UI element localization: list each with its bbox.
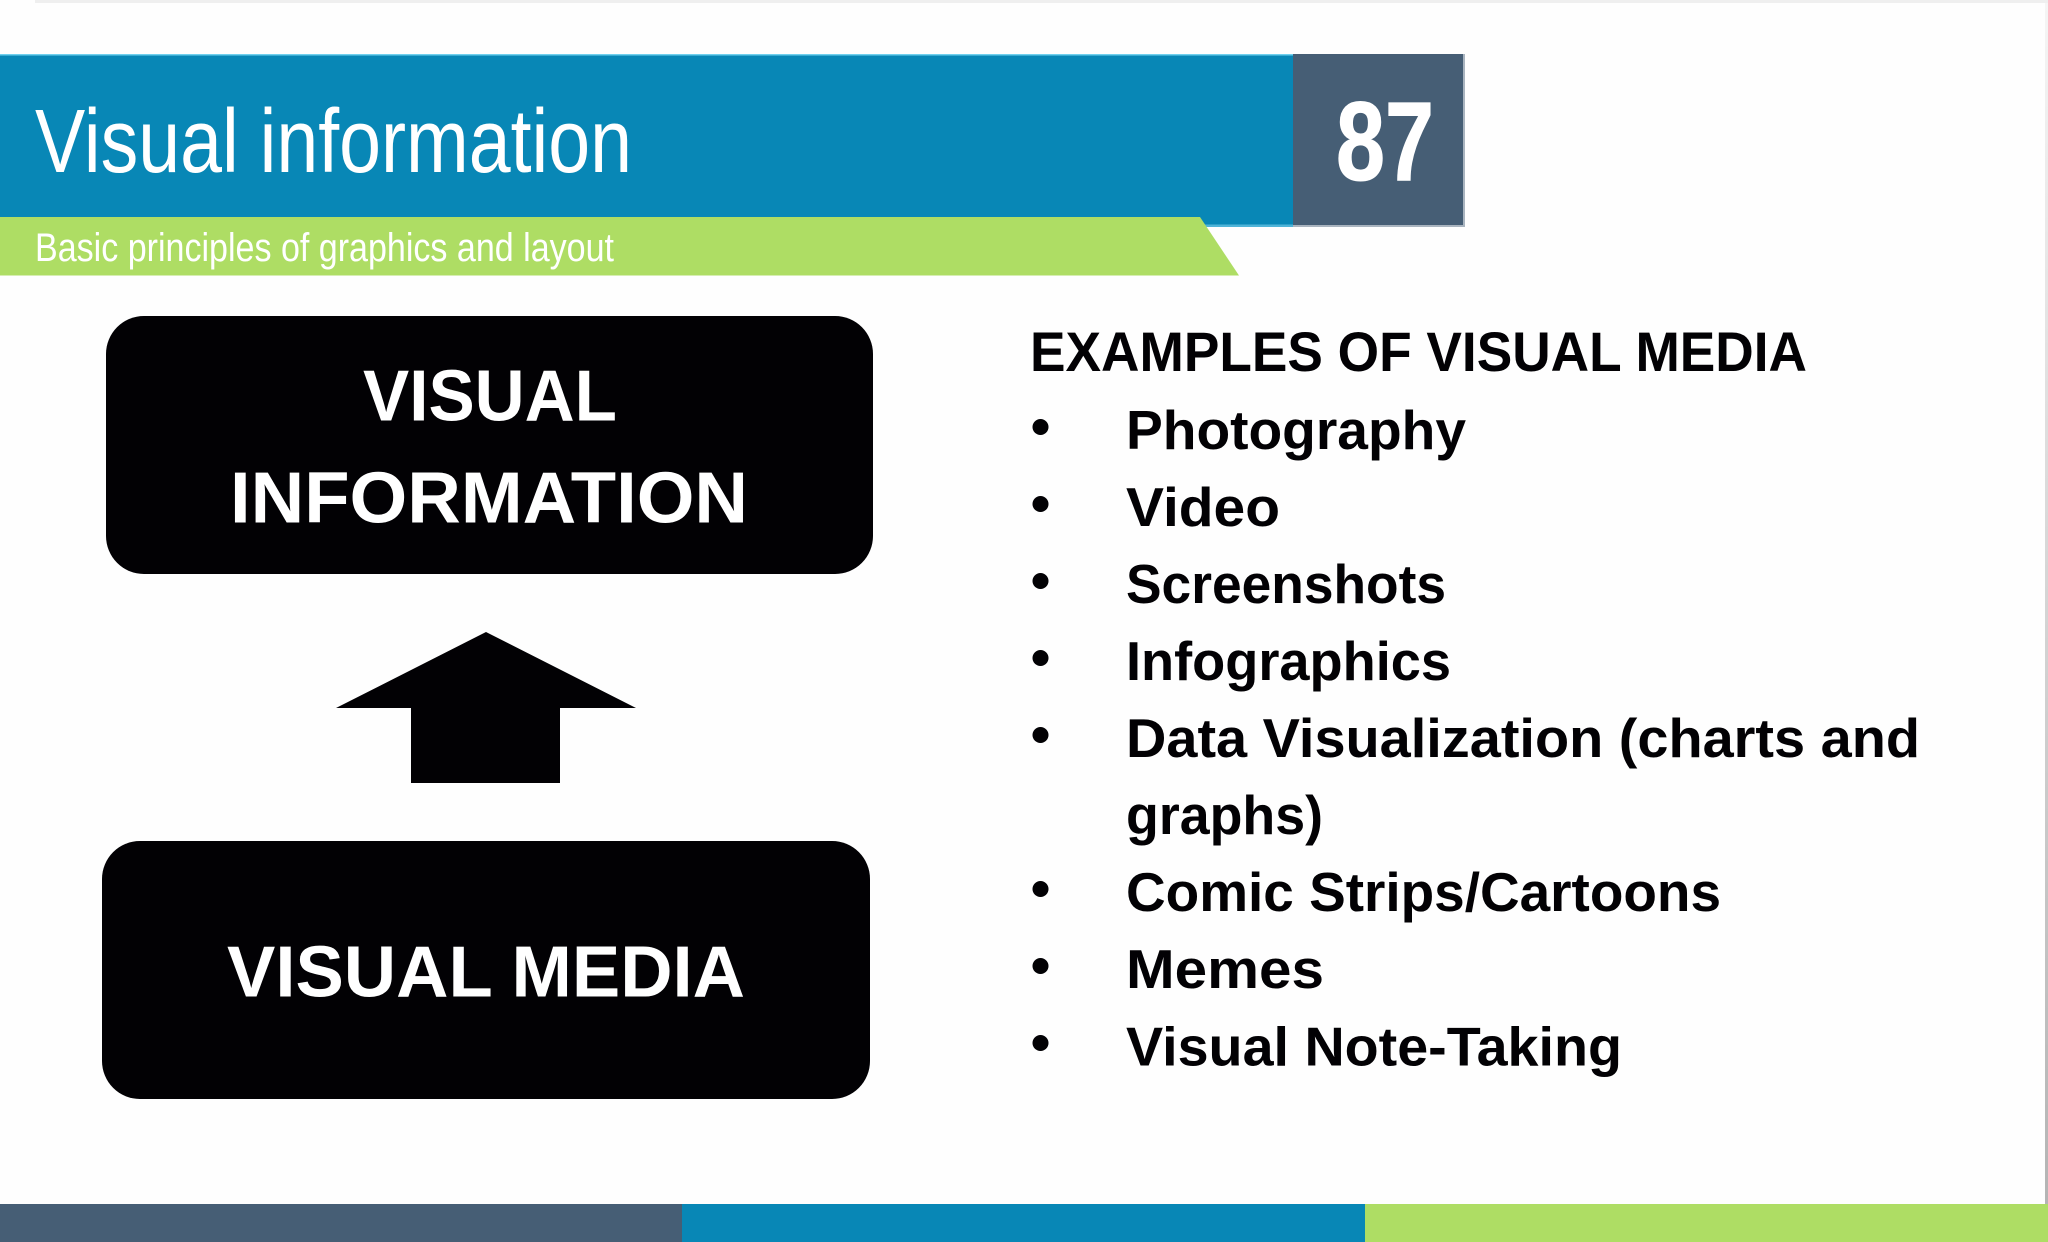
item: data visualization: graphs) xyxy=(1126,784,1323,846)
box: visual information: INFORMATION xyxy=(230,458,748,538)
footer colour band xyxy=(0,1204,2048,1242)
item: comic strips: Comic Strips/Cartoons xyxy=(1126,861,1721,923)
list: examples of visual media xyxy=(1032,399,1920,1078)
item: video xyxy=(1032,476,1280,538)
item: infographics: Infographics xyxy=(1126,630,1451,692)
subtitle ribbon: Basic principles of graphics and layout xyxy=(35,226,614,270)
item: screenshots: Screenshots xyxy=(1126,553,1446,615)
title: Visual information xyxy=(35,92,632,192)
item: photography: Photography xyxy=(1126,399,1466,461)
box: visual information: VISUAL xyxy=(363,356,617,436)
header banner xyxy=(0,54,1465,227)
box: visual media: VISUAL MEDIA xyxy=(227,932,745,1012)
subtitle ribbon xyxy=(0,217,1239,276)
item: visual note-taking: Visual Note-Taking xyxy=(1126,1016,1622,1078)
item: memes xyxy=(1032,938,1324,1000)
item: data visualization xyxy=(1032,707,1920,846)
item: data visualization: Data Visualization (charts and xyxy=(1126,707,1920,769)
page number box: 87 xyxy=(1336,79,1434,204)
box: visual information xyxy=(106,316,873,574)
box: visual media xyxy=(102,841,870,1099)
item: memes: Memes xyxy=(1126,938,1324,1000)
list heading: EXAMPLES OF VISUAL MEDIA xyxy=(1030,320,1807,383)
item: video: Video xyxy=(1126,476,1280,538)
arrow: up from visual media to visual information xyxy=(336,632,636,783)
page number box xyxy=(1293,54,1465,227)
